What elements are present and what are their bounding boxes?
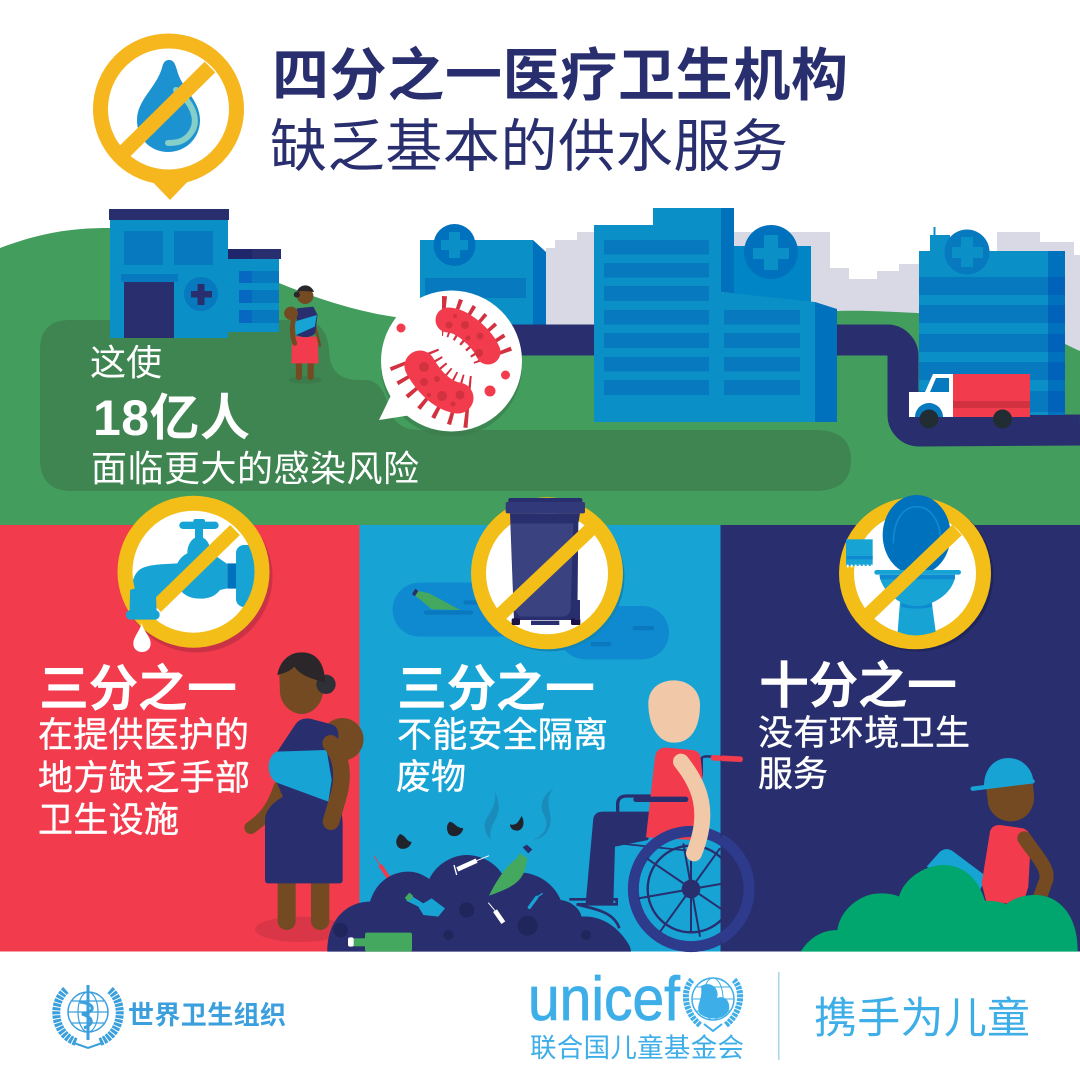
intro: 这使 <box>90 342 162 383</box>
tagline: 携手为儿童 <box>814 995 1030 1043</box>
panel: waste management <box>327 498 749 952</box>
description <box>396 716 608 797</box>
icon: crossed-out toilet <box>842 495 994 652</box>
large central hospital building <box>594 208 837 422</box>
heading: 三分之一 <box>397 661 595 717</box>
syringe red <box>374 856 388 877</box>
small woman with baby <box>284 285 322 384</box>
bacterium lower <box>414 358 470 406</box>
icon: crossed-out waste bin <box>474 498 624 652</box>
WHO logo <box>56 985 286 1048</box>
green bottle small <box>348 933 412 952</box>
risk statement: 面临更大的感染风险 <box>91 448 419 489</box>
syringe white upper <box>454 856 489 875</box>
description <box>758 714 970 794</box>
wheelchair and man <box>569 680 749 947</box>
bush <box>801 865 1078 952</box>
panel: sanitation <box>720 495 1080 952</box>
title <box>270 44 848 179</box>
green hill landscape <box>0 228 1080 530</box>
waste heap <box>327 855 631 952</box>
WHO emblem <box>56 985 120 1048</box>
bacteria speech bubble <box>379 290 522 436</box>
UNICEF Chinese name: 联合国儿童基金会 <box>530 1033 744 1063</box>
left hospital building <box>420 224 546 330</box>
syringe white lower <box>488 903 503 923</box>
description <box>38 716 250 840</box>
wheelchair wheel over panel <box>720 755 749 939</box>
description: 地方缺乏手部 <box>38 759 250 798</box>
description: 废物 <box>396 758 466 797</box>
description: 服务 <box>758 755 828 794</box>
title line 1: 四分之一医疗卫生机构 <box>272 44 848 108</box>
blue bottle <box>406 895 445 917</box>
syringe blue <box>529 893 543 907</box>
UNICEF logo <box>528 965 744 1063</box>
boy figure <box>927 758 1047 903</box>
small clinic building <box>109 209 281 338</box>
panel: hand hygiene <box>0 500 364 952</box>
WHO name: 世界卫生组织 <box>128 1000 286 1030</box>
polluted water pools <box>393 583 669 659</box>
icon: crossed-out tap <box>120 500 272 652</box>
title line 2: 缺乏基本的供水服务 <box>270 115 788 179</box>
number: 18亿人 <box>93 390 250 446</box>
background city skyline <box>546 232 1080 360</box>
mother and baby figure <box>251 652 364 942</box>
heading: 十分之一 <box>759 658 957 714</box>
dark green text panel <box>40 320 851 491</box>
green bottle large <box>489 845 532 896</box>
divider <box>778 972 780 1060</box>
bacterium upper <box>442 314 494 360</box>
wordmark: unicef <box>528 965 681 1034</box>
heading: 三分之一 <box>39 661 237 717</box>
UNICEF emblem <box>686 978 740 1031</box>
description: 没有环境卫生 <box>758 714 970 753</box>
description: 卫生设施 <box>38 801 179 840</box>
right hospital building <box>919 227 1065 415</box>
description: 不能安全隔离 <box>397 716 608 755</box>
text: 18亿人 statistic <box>90 342 419 489</box>
icon: crossed-out water drop <box>100 41 236 200</box>
truck <box>909 374 1030 428</box>
description: 在提供医护的 <box>38 716 249 755</box>
flies <box>396 816 523 849</box>
road <box>500 340 1080 431</box>
stench lines <box>485 787 554 840</box>
